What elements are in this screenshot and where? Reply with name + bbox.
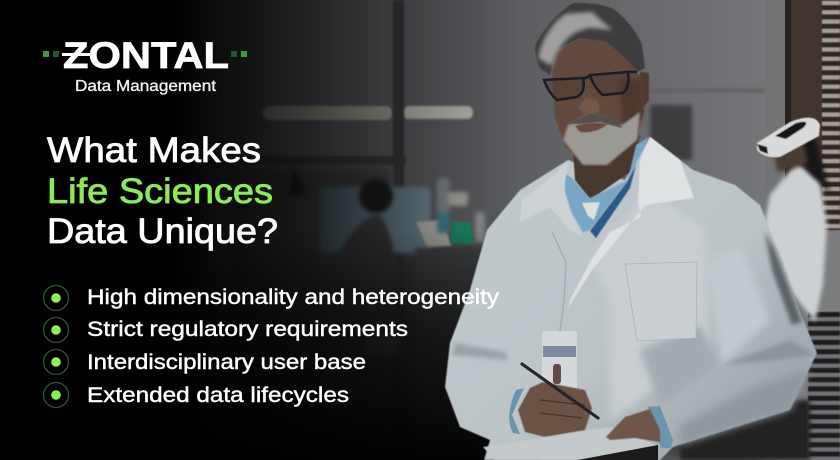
- hair: [792, 134, 830, 192]
- mouth: [575, 123, 608, 132]
- cheek shade: [620, 78, 643, 130]
- list item 2: Strict regulatory requirements: [87, 317, 408, 341]
- right cuff: [648, 406, 673, 448]
- bullet icon 3: [44, 350, 68, 374]
- ceiling light, right section: [403, 106, 473, 119]
- title: What Makes: [47, 130, 261, 170]
- monitor: [320, 187, 430, 253]
- logo left squares: [43, 51, 59, 57]
- hanging lamp: [288, 168, 306, 196]
- finger shadows: [540, 400, 585, 418]
- lab bench: [415, 248, 515, 460]
- pale wall column: [765, 0, 787, 230]
- sleeve elbow shade: [722, 340, 815, 365]
- lab coat: [445, 137, 817, 460]
- left coat lapel: [520, 162, 583, 236]
- list item 3: Interdisciplinary user base: [87, 350, 366, 374]
- moustache: [568, 113, 622, 128]
- bullet icon 1: [44, 286, 68, 310]
- dark lower right corner: [680, 400, 810, 460]
- VR headset: [757, 118, 820, 157]
- wall seam: [650, 88, 765, 93]
- coat side shadow: [640, 325, 720, 405]
- brown window frame: [785, 0, 840, 215]
- dark sleeve fold: [765, 232, 802, 325]
- background person head: [359, 179, 393, 213]
- white box on bench: [416, 220, 452, 248]
- lower room darker area: [230, 168, 390, 460]
- main scientist: [445, 3, 817, 460]
- left sleeve fold: [452, 343, 508, 360]
- ZONTAL wordmark: ZONTAL: [63, 35, 229, 76]
- dark wall panel: [650, 105, 692, 160]
- left dark fade: [0, 0, 520, 460]
- flasks: [437, 178, 485, 242]
- bottom dark fade: [0, 230, 540, 460]
- dark placket: [590, 165, 636, 238]
- coat sleeve light: [705, 245, 770, 365]
- bottom lab items: [365, 335, 400, 355]
- white undershirt: [582, 202, 600, 220]
- hair: [535, 3, 645, 75]
- green beaker: [450, 222, 474, 244]
- ceiling light, left section: [263, 106, 392, 120]
- list item 1: High dimensionality and heterogeneity: [87, 285, 499, 309]
- logo subtitle: Data Management: [75, 78, 217, 95]
- glasses: [544, 72, 637, 100]
- coat: [762, 163, 827, 322]
- clipboard: [483, 427, 657, 460]
- background scientist with VR headset: [757, 118, 830, 322]
- window slats, lower right: [808, 312, 840, 460]
- left cuff: [509, 388, 524, 434]
- grey hair highlight: [538, 12, 612, 66]
- chest pocket: [625, 262, 697, 341]
- ear: [640, 72, 649, 112]
- dark window post: [785, 0, 791, 215]
- logo: [43, 35, 247, 95]
- blue shirt: [562, 137, 649, 232]
- background person body: [330, 214, 398, 300]
- right coat lapel: [568, 137, 694, 308]
- ID badge: [542, 331, 577, 391]
- list item 4: Extended data lifecycles: [87, 383, 349, 407]
- bullet list: [44, 285, 499, 408]
- bullet icon 2: [44, 318, 68, 342]
- left hand: [518, 382, 592, 437]
- forearm shade: [680, 370, 810, 445]
- window slats, upper right: [822, 0, 840, 230]
- lanyard: [552, 232, 566, 332]
- face: [772, 136, 808, 172]
- face: [552, 38, 644, 163]
- pen: [522, 364, 598, 418]
- coat chest light area: [590, 190, 710, 420]
- glass partition vertical beam: [393, 0, 404, 460]
- title: [47, 130, 278, 251]
- title: Life Sciences: [47, 171, 273, 211]
- bullet icon 4: [44, 382, 68, 408]
- title: Data Unique?: [47, 211, 278, 251]
- glass partition horizontal beam: [240, 156, 406, 165]
- nose: [578, 98, 600, 114]
- beard: [563, 112, 640, 165]
- lower room darkening: [380, 250, 760, 460]
- right hand: [606, 409, 660, 442]
- neck: [573, 135, 640, 200]
- clipboard dark edge: [578, 445, 658, 460]
- logo crossbar: [62, 53, 94, 56]
- logo right squares: [231, 51, 247, 57]
